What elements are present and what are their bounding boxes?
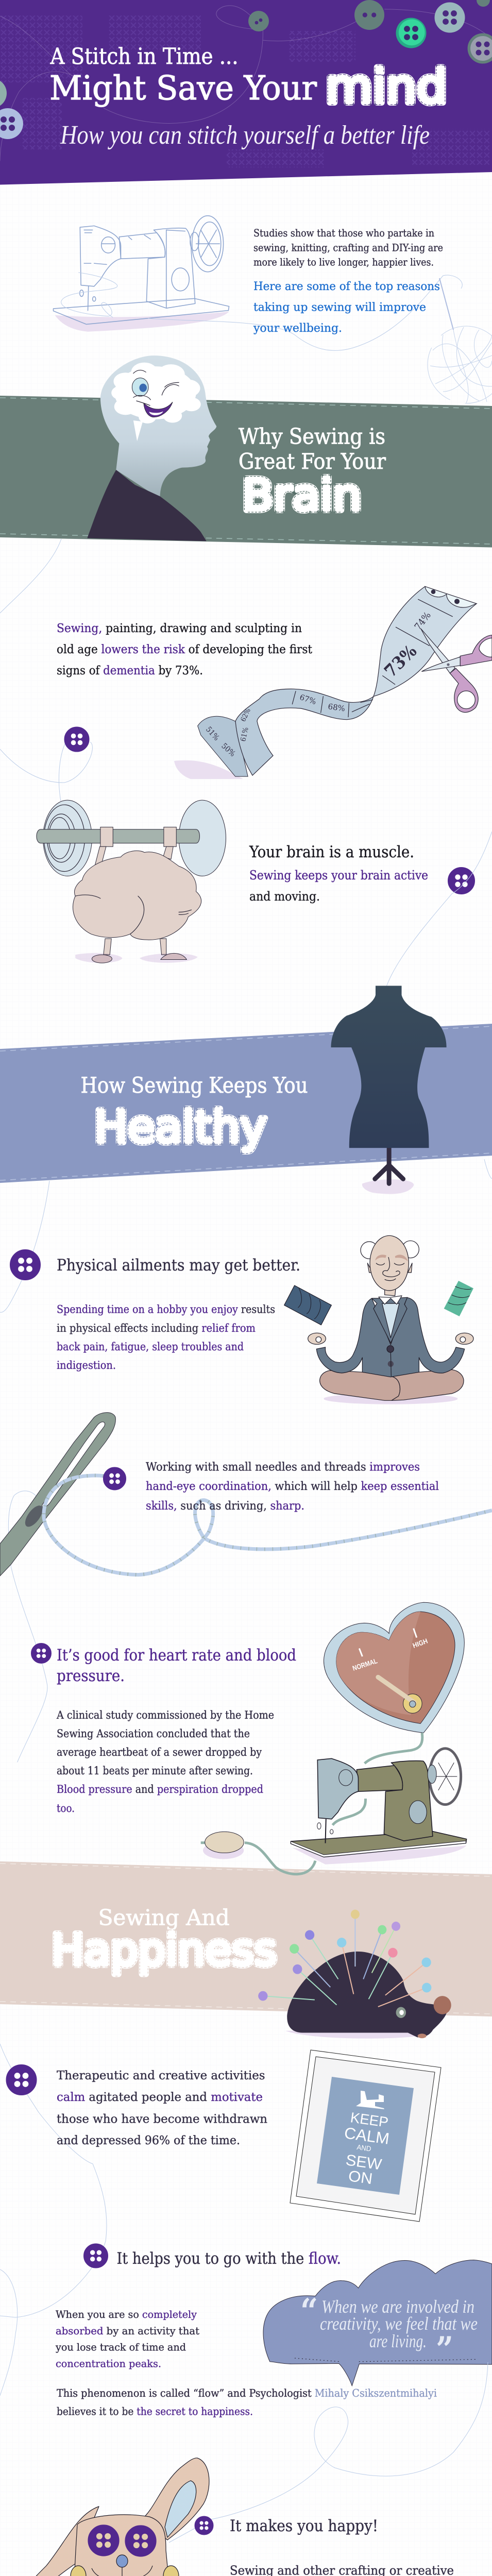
icon: heart gauge: HIGH [412,1637,429,1650]
flow text: you lose track of time and [55,2341,186,2353]
icon: dress form [331,986,447,1194]
needle skill text [146,1461,439,1513]
dementia text: Sewing, painting, drawing and sculpting in [57,622,302,635]
heading: why sewing [239,424,386,474]
icon: needle with thick thread [0,1413,492,1762]
needle skill text: Working with small needles and threads improves [146,1461,420,1473]
icon: header buttons [0,0,492,139]
clinical study text: about 11 beats per minute after sewing. [57,1765,253,1777]
thread [0,1159,492,1312]
icon: meditating man with spools [284,1235,473,1404]
therapy text: those who have become withdrawn [57,2112,267,2126]
icon: heart gauge: NORMAL [351,1657,378,1672]
intro highlight text [253,280,440,335]
intro highlight text: Here are some of the top reasons [253,280,440,293]
icon: tape measure and scissors: 51% [204,725,222,742]
therapy text: calm agitated people and motivate [57,2091,263,2104]
icon: hedgehog pin cushion [258,1910,451,2039]
heading: physical ailments: Physical ailments may get better. [57,1256,300,1275]
clinical study text: A clinical study commissioned by the Home [56,1709,274,1721]
thread left [0,539,92,801]
icon: purple button [83,2244,108,2268]
heading: why sewing: Why Sewing is [239,424,385,449]
icon: tape measure and scissors: 61% [239,726,250,742]
poster: keep calm and sew on: CALM [343,2124,391,2148]
clinical study text [56,1709,274,1815]
icon: purple button [448,868,475,894]
heading: heart rate: pressure. [57,1667,125,1685]
dementia text: old age lowers the risk of developing the first [57,643,313,656]
thread and yarn ball [148,275,492,403]
thread right [386,832,492,987]
intro text: more likely to live longer, happier lives. [253,257,434,268]
therapy text [57,2069,267,2147]
muscle text: Your brain is a muscle. [249,843,414,861]
intro highlight text: taking up sewing will improve [253,301,426,314]
poster: keep calm and sew on: ON [347,2167,374,2188]
icon: olive sewing machine [291,1749,467,1865]
icon: purple button [64,727,89,752]
therapy text: and depressed 96% of the time. [57,2134,240,2147]
poster: keep calm and sew on: AND [357,2143,372,2153]
icon: tape measure and scissors: 50% [219,741,237,758]
heading word: Brain stitched: Brain [242,470,362,520]
clinical study text: Sewing Association concluded that the [57,1727,250,1740]
muscle text [249,843,428,904]
intro text [253,227,443,268]
intro text: sewing, knitting, crafting and DIY-ing are [253,242,443,253]
icon: purple button [195,2516,213,2535]
needle skill text: hand-eye coordination, which will help keep essential [146,1480,439,1493]
thread [0,2044,107,2396]
panel: quote cloud [263,2260,492,2386]
dementia text: signs of dementia by 73%. [57,664,203,677]
panel: happiness banner [0,1861,492,2016]
panel: brain banner [0,396,492,547]
title word: mind stitched: mind [326,60,447,114]
icon: sewing machine outline [54,216,229,332]
icon: brain lifting barbell [37,800,226,963]
flow phenomenon text: This phenomenon is called “flow” and Psychologist Mihaly Csikszentmihalyi [57,2387,437,2399]
icon: purple button [31,1643,52,1663]
heading: heart rate: It’s good for heart rate and blood [57,1646,296,1665]
panel: healthy banner [0,1024,492,1183]
icon: purple button [10,1250,40,1280]
muscle text: Sewing keeps your brain active [249,868,428,883]
heading word: Happiness stitched: Happiness [52,1925,277,1975]
icon: purple button [103,1467,126,1490]
physical text: Spending time on a hobby you enjoy results [57,1303,275,1316]
intro highlight text: your wellbeing. [253,322,342,335]
icon: tape measure and scissors: 68% [327,702,346,714]
title line 2: Might Save Your [49,69,317,108]
clinical study text: too. [57,1802,75,1815]
panel: quote cloud: ” [436,2329,453,2369]
heading: it makes you happy: It makes you happy! [230,2517,378,2535]
flow text: concentration peaks. [56,2358,161,2370]
panel: quote cloud: “ [300,2291,318,2331]
panel: quote cloud: are living. [369,2331,427,2351]
muscle text: and moving. [249,889,320,904]
thread loop [169,2362,488,2543]
icon: tape measure and scissors: 73% [380,641,420,681]
heading: sewing and: Sewing And [98,1905,230,1930]
title line 1: A Stitch in Time ... [50,44,238,70]
heading: heart rate [57,1646,296,1685]
icon: head with winking brain [87,355,216,541]
heading word: Healthy stitched: Healthy [94,1101,266,1153]
physical text: in physical effects including relief from [57,1322,256,1334]
flow text [55,2308,200,2370]
icon: tape measure and scissors: 67% [298,692,317,706]
clinical study text: Blood pressure and perspiration dropped [57,1783,263,1795]
icon: purple button [6,2065,37,2095]
poster: keep calm and sew on [290,2050,441,2222]
icon: bobbin and cord [201,1799,365,1874]
needle skill text: skills, such as driving, sharp. [146,1500,304,1513]
flow phenomenon text: believes it to be the secret to happiness. [57,2405,253,2417]
heading: why sewing: Great For Your [239,449,386,474]
therapy text: Therapeutic and creative activities [57,2069,265,2082]
panel: purple header [0,0,492,184]
physical text: indigestion. [57,1359,116,1371]
icon: patchwork bunny [27,2458,209,2576]
dementia text [57,622,313,677]
heading: flow: It helps you to go with the flow. [116,2249,341,2268]
flow text: When you are so completely [56,2308,197,2320]
poster: keep calm and sew on: KEEP [349,2109,389,2130]
flow text: absorbed by an activity that [56,2325,200,2337]
icon: tape measure and scissors [174,586,492,779]
flow phenomenon text [57,2387,437,2417]
subtitle: How you can stitch yourself a better life [60,121,430,150]
physical text: back pain, fatigue, sleep troubles and [57,1341,244,1353]
icon: heart gauge [324,1602,464,1764]
icon: tape measure and scissors: 74% [413,610,433,632]
physical text [57,1303,275,1371]
icon: tape measure and scissors: 62% [240,707,252,723]
clinical study text: average heartbeat of a sewer dropped by [57,1746,262,1758]
intro text: Studies show that those who partake in [253,227,434,239]
poster: keep calm and sew on: SEW [345,2151,383,2174]
heading: how sewing keeps you: How Sewing Keeps You [80,1073,308,1098]
